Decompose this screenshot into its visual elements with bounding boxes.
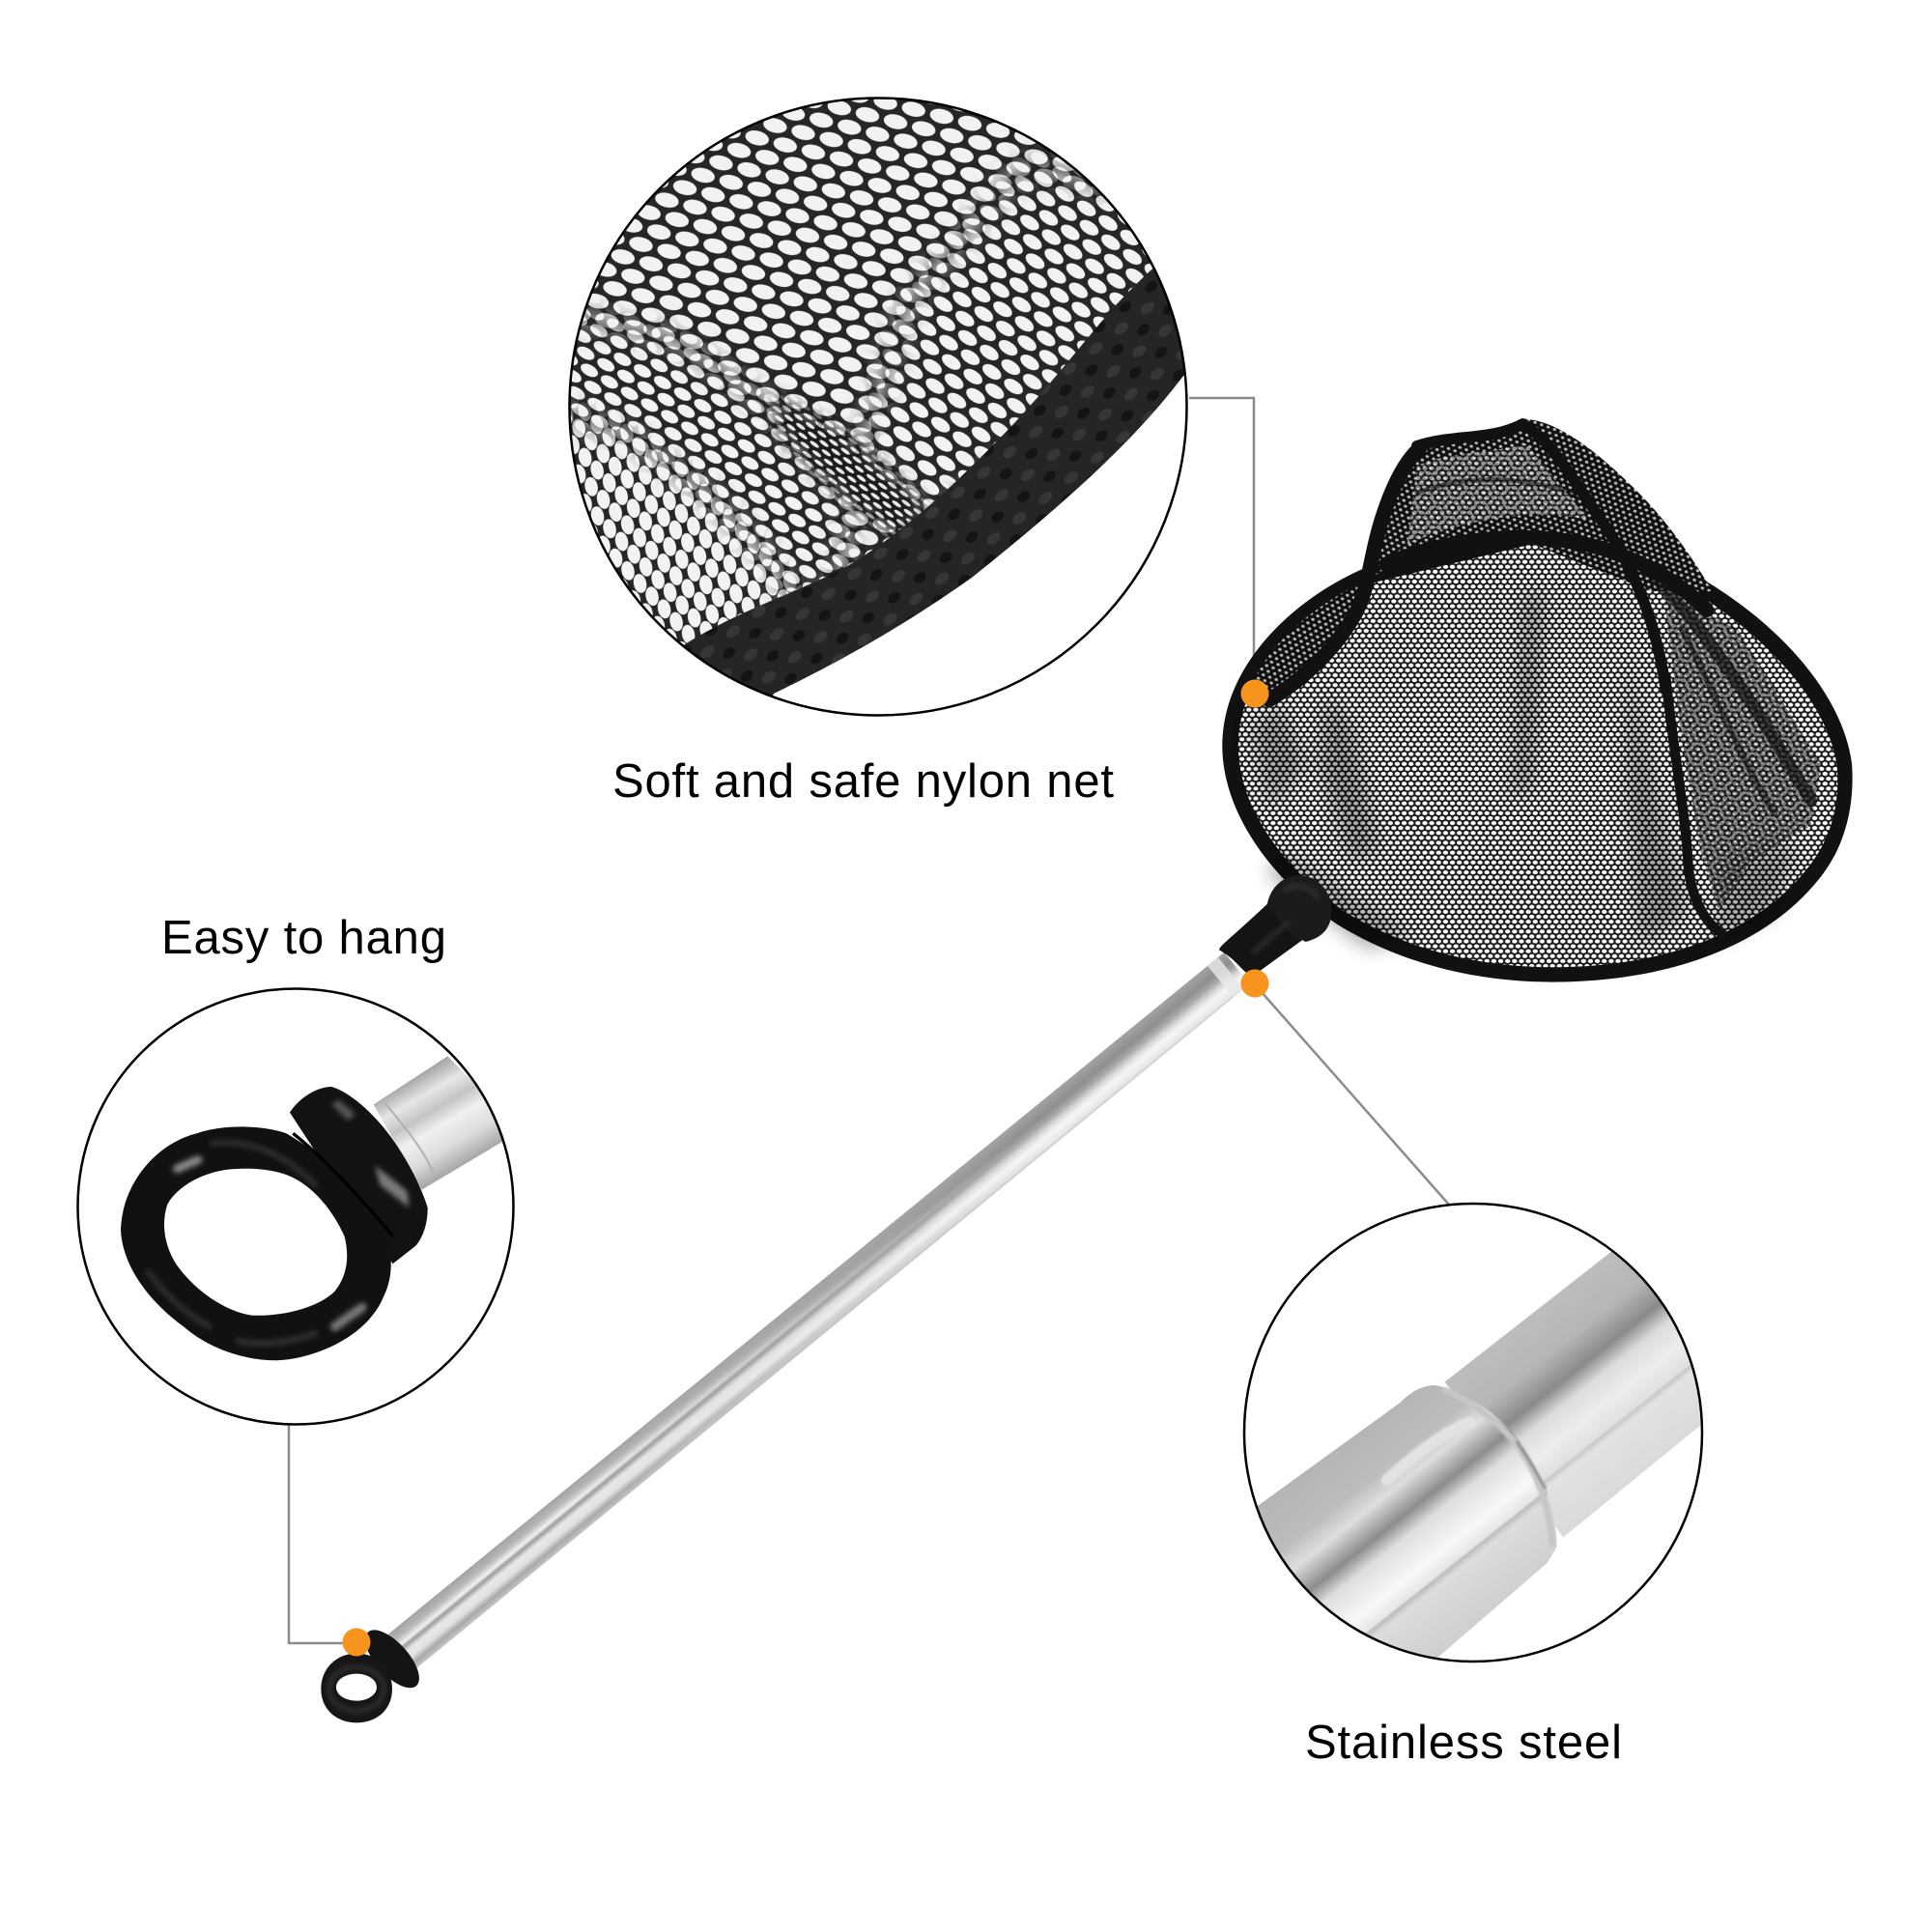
detail circle: stainless steel	[1242, 1202, 1704, 1663]
connector line: nylon net callout	[1189, 398, 1254, 694]
hem band	[684, 269, 1184, 694]
black collar	[290, 1087, 428, 1264]
right mesh	[846, 147, 1151, 520]
white area below hem	[773, 375, 1186, 715]
circle outline	[570, 99, 1186, 715]
bottom hanging ring on pole	[321, 1621, 428, 1722]
hoop rim	[1222, 529, 1853, 982]
socket ball	[1267, 875, 1331, 942]
metal tube	[373, 1057, 502, 1190]
mid-left mesh	[570, 298, 869, 603]
telescopic stainless steel pole	[378, 951, 1251, 1677]
black handle socket	[1219, 875, 1331, 976]
net head: hoop, mesh and folded bag	[1222, 419, 1853, 982]
detail circle: nylon net	[568, 97, 1188, 717]
hump of bag	[1370, 419, 1713, 591]
connector line: stainless steel callout	[1254, 983, 1449, 1205]
upper-left dark mesh	[1247, 579, 1370, 702]
collar seam	[293, 1133, 393, 1236]
stripe highlight	[1387, 1422, 1470, 1480]
folded edge bands	[1269, 424, 1811, 933]
dense crease	[763, 388, 933, 542]
narrower tube section	[1445, 1252, 1700, 1538]
soft shadows in mesh	[1251, 591, 1799, 949]
right sheer fold	[1663, 591, 1821, 912]
detail circle: hanging ring	[77, 989, 522, 1424]
label: stainless steel: Stainless steel	[1305, 1717, 1622, 1769]
collar highlights	[331, 1099, 409, 1208]
ring highlight	[329, 1667, 384, 1711]
label: nylon net: Soft and safe nylon net	[612, 755, 1114, 808]
loop highlights	[148, 1143, 362, 1344]
connector line: hanging ring callout	[289, 1425, 356, 1643]
lower-left mesh	[570, 394, 810, 643]
label: easy to hang: Easy to hang	[161, 912, 446, 964]
circle outline	[77, 989, 514, 1424]
shoulder shadow	[1517, 1441, 1546, 1490]
lighter window in hump	[1407, 443, 1589, 545]
circle outline	[1244, 1204, 1702, 1662]
socket highlights	[1253, 886, 1319, 953]
upper mesh	[578, 99, 1107, 696]
wider tube section	[1258, 1385, 1557, 1658]
shoulder edge	[1444, 1390, 1552, 1544]
inner mesh	[1238, 542, 1837, 967]
ring loop	[321, 1654, 392, 1722]
orange marker dots	[342, 680, 1269, 1656]
loop	[121, 1126, 391, 1360]
